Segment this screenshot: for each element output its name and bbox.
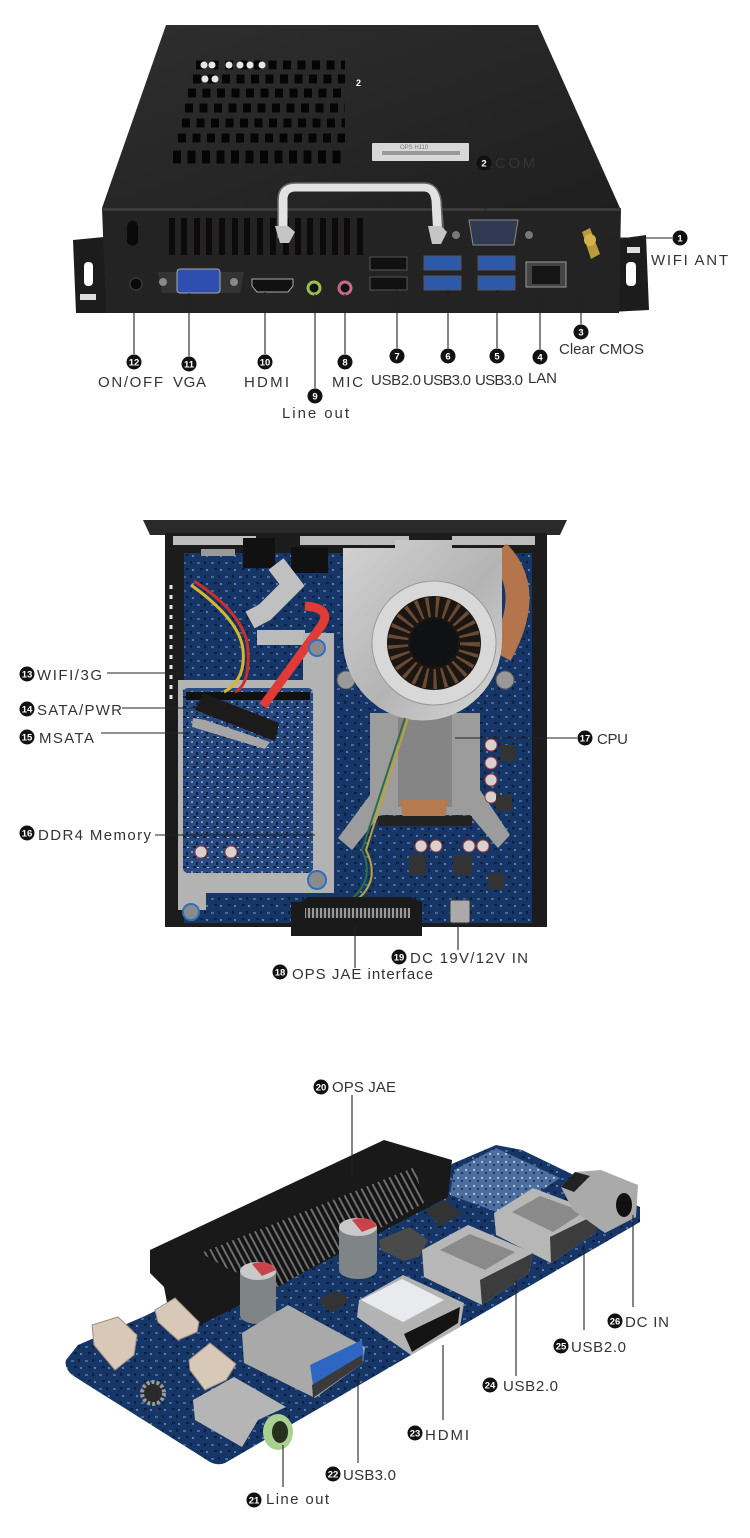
front panel <box>102 208 621 313</box>
callout 20 OPS JAE: 20 <box>316 1082 326 1094</box>
power wires <box>191 581 248 692</box>
callout 16 DDR4 Memory: 16 <box>22 828 32 840</box>
inductor and IC chips <box>318 1200 462 1313</box>
callout 11 VGA: VGA <box>173 374 206 391</box>
callout 6 USB3.0: 6 <box>445 352 451 362</box>
COM port <box>451 220 534 245</box>
fan <box>387 596 481 690</box>
callout 13 WIFI/3G: WIFI/3G <box>37 667 102 684</box>
callout 9 Line out: Line out <box>282 405 350 422</box>
callout 16 DDR4 Memory <box>20 826 315 844</box>
callout 24 USB2.0 <box>482 1280 558 1395</box>
LAN port <box>526 262 566 287</box>
callout 6 USB3.0: USB3.0 <box>423 372 471 389</box>
callout 7 USB2.0 <box>371 290 421 389</box>
red SATA cable <box>263 606 325 706</box>
white header connectors <box>92 1298 236 1390</box>
callout 2 COM: 2 <box>481 158 487 170</box>
USB2.0 ports <box>370 257 407 290</box>
callout 1 WIFI ANT <box>610 230 728 269</box>
USB 2.0 lower port <box>422 1225 533 1305</box>
callout 9 Line out: 9 <box>312 392 318 402</box>
JAE connector body <box>150 1140 452 1327</box>
line-out audio jack <box>193 1377 293 1450</box>
callout 8 MIC: MIC <box>332 374 363 391</box>
panel: inside view of OPS PC <box>143 520 567 936</box>
callout 18 OPS JAE interface: OPS JAE interface <box>292 966 433 983</box>
callout 15 MSATA <box>20 730 190 747</box>
top plate with vent grille <box>102 25 620 208</box>
callout 7 USB2.0: 7 <box>394 352 400 362</box>
HDMI port <box>252 279 293 292</box>
callout 21 Line out <box>246 1445 330 1508</box>
callout 20 OPS JAE <box>314 1079 396 1175</box>
callout 4 LAN: LAN <box>528 370 557 387</box>
capacitors <box>195 739 497 858</box>
callout 11 VGA: 11 <box>184 360 195 370</box>
callout 2 COM: COM <box>495 155 535 172</box>
callout 25 USB2.0: 25 <box>556 1342 567 1352</box>
power button <box>130 278 142 290</box>
CPU heatsink base <box>337 671 514 850</box>
callout 17 CPU: 17 <box>580 734 590 744</box>
main board <box>184 553 532 923</box>
connector pins <box>201 1167 424 1287</box>
callout 2 COM <box>476 155 535 218</box>
SATA connector <box>192 693 279 749</box>
callout 3 Clear CMOS: Clear CMOS <box>559 341 644 358</box>
callout 12 ON/OFF: 12 <box>129 358 139 368</box>
fan housing <box>343 540 502 721</box>
callout 16 DDR4 Memory: DDR4 Memory <box>38 827 152 844</box>
callout 13 WIFI/3G: 13 <box>22 670 32 680</box>
top connectors <box>201 538 328 573</box>
USB 3.0 port <box>242 1305 365 1398</box>
callout 18 OPS JAE interface: 18 <box>275 968 285 978</box>
product label sticker <box>372 143 469 161</box>
PCB light speckle area <box>450 1148 560 1215</box>
callout 4 LAN: 4 <box>537 352 543 364</box>
callout 19 DC 19V/12V IN: DC 19V/12V IN <box>410 950 528 967</box>
ribbon cable <box>250 564 292 620</box>
memory module <box>183 688 313 873</box>
callout 12 ON/OFF <box>98 290 163 391</box>
callout 3 Clear CMOS <box>559 290 644 358</box>
callout 7 USB2.0: USB2.0 <box>371 372 421 389</box>
callout 26 DC IN <box>608 1215 669 1331</box>
capacitors <box>240 1218 377 1324</box>
callout 23 HDMI: HDMI <box>425 1427 469 1444</box>
VGA port <box>158 269 244 293</box>
callout 25 USB2.0: USB2.0 <box>571 1339 626 1356</box>
callout 5 USB3.0 <box>475 290 523 389</box>
callout 8 MIC <box>332 294 363 391</box>
HDMI port <box>357 1275 464 1355</box>
callout 9 Line out <box>282 294 350 422</box>
callout 20 OPS JAE: OPS JAE <box>332 1079 396 1096</box>
callout 1 WIFI ANT: WIFI ANT <box>651 252 728 269</box>
callout 4 LAN <box>528 290 557 387</box>
callout 1 WIFI ANT: 1 <box>677 234 683 244</box>
callout 19 DC 19V/12V IN: 19 <box>394 952 404 964</box>
callout 24 USB2.0: USB2.0 <box>503 1378 558 1395</box>
callout 22 USB3.0 <box>326 1375 396 1484</box>
callout 17 CPU <box>455 730 628 748</box>
USB 2.0 upper port <box>494 1188 599 1263</box>
mounting ears <box>73 235 649 313</box>
callout 13 WIFI/3G <box>20 666 180 684</box>
callout 12 ON/OFF: ON/OFF <box>98 374 163 391</box>
fan wires <box>296 718 408 910</box>
callout 15 MSATA: 15 <box>22 732 33 744</box>
callout 11 VGA <box>173 293 206 391</box>
copper heat pipe <box>498 552 518 655</box>
callout 3 Clear CMOS: 3 <box>578 328 584 338</box>
callout 22 USB3.0: 22 <box>328 1470 338 1480</box>
adapter PCB <box>66 1145 640 1464</box>
serial sticker <box>257 630 305 645</box>
top plate with vent grille: 2 <box>356 78 361 88</box>
callout 14 SATA/PWR <box>20 702 196 719</box>
callout 15 MSATA: MSATA <box>39 730 94 747</box>
mounting hole <box>142 1382 164 1404</box>
panel: front view of OPS PC chassis <box>73 25 649 313</box>
callout 6 USB3.0 <box>423 290 471 389</box>
callout 23 HDMI: 23 <box>410 1428 420 1440</box>
audio jacks <box>308 282 351 294</box>
callout 14 SATA/PWR: SATA/PWR <box>37 702 122 719</box>
callout 23 HDMI <box>408 1345 469 1444</box>
callout 22 USB3.0: USB3.0 <box>343 1467 396 1484</box>
OPS JAE connector <box>291 897 422 936</box>
DC input jack <box>450 900 470 923</box>
callout 19 DC 19V/12V IN <box>392 923 528 967</box>
carry handle <box>275 183 447 244</box>
memory bay bracket <box>178 633 334 910</box>
callout 17 CPU: CPU <box>597 731 628 748</box>
callout 14 SATA/PWR: 14 <box>22 704 33 716</box>
callout 5 USB3.0: USB3.0 <box>475 372 523 389</box>
bracket screws <box>183 640 326 920</box>
chassis frame <box>143 520 567 927</box>
callout 8 MIC: 8 <box>342 358 348 368</box>
callout 21 Line out: 21 <box>249 1496 260 1506</box>
callout 10 HDMI <box>244 292 289 391</box>
callout 25 USB2.0 <box>554 1245 626 1356</box>
callout 10 HDMI: HDMI <box>244 374 289 391</box>
antenna connector <box>582 228 600 259</box>
callout 18 OPS JAE interface <box>272 925 433 983</box>
product label sticker: OPS H110 <box>400 145 429 151</box>
callout 26 DC IN: 26 <box>610 1316 620 1328</box>
DC power jack <box>561 1170 638 1233</box>
callout 5 USB3.0: 5 <box>494 352 500 362</box>
callout 24 USB2.0: 24 <box>485 1380 496 1392</box>
callout 21 Line out: Line out <box>266 1491 330 1508</box>
panel: OPS adapter board <box>66 1140 640 1464</box>
callout 10 HDMI: 10 <box>260 358 270 368</box>
callout 26 DC IN: DC IN <box>625 1314 669 1331</box>
chips <box>409 745 516 889</box>
USB3.0 ports <box>424 256 515 290</box>
